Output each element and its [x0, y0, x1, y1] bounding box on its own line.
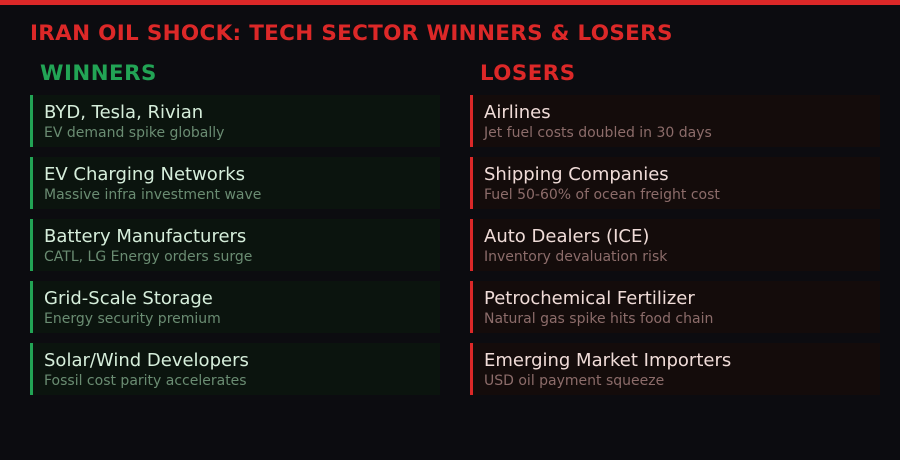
card: petrochemical: Petrochemical Fertilizer [484, 288, 695, 309]
card: grid storage: Grid-Scale Storage [44, 288, 213, 309]
card: airlines [470, 95, 880, 147]
card: petrochemical: Natural gas spike hits food chain [484, 311, 713, 327]
card: BYD: EV demand spike globally [44, 125, 224, 141]
card: EV charging: EV Charging Networks [44, 164, 245, 185]
card: auto dealers: Inventory devaluation risk [484, 249, 667, 265]
card: auto dealers: Auto Dealers (ICE) [484, 226, 649, 247]
card: solar/wind [30, 343, 440, 395]
panel: winners [30, 61, 261, 395]
card: airlines: Jet fuel costs doubled in 30 days [484, 125, 712, 141]
heading: winners: WINNERS [40, 61, 157, 86]
card: grid storage [30, 281, 440, 333]
card: auto dealers [470, 219, 880, 271]
card: emerging markets [470, 343, 880, 395]
card: battery [30, 219, 440, 271]
card: BYD [30, 95, 440, 147]
card: solar/wind: Solar/Wind Developers [44, 350, 249, 371]
card: petrochemical [470, 281, 880, 333]
card: EV charging: Massive infra investment wave [44, 187, 261, 203]
card: solar/wind: Fossil cost parity accelerates [44, 373, 247, 389]
card: EV charging [30, 157, 440, 209]
card: emerging markets: USD oil payment squeeze [484, 373, 664, 389]
card: shipping: Fuel 50-60% of ocean freight cost [484, 187, 720, 203]
card: airlines: Airlines [484, 102, 551, 123]
card: shipping: Shipping Companies [484, 164, 669, 185]
panel: losers [470, 61, 731, 395]
card: shipping [470, 157, 880, 209]
card: grid storage: Energy security premium [44, 311, 221, 327]
card: emerging markets: Emerging Market Importers [484, 350, 731, 371]
title: IRAN OIL SHOCK: TECH SECTOR WINNERS & LOSERS [30, 21, 673, 46]
card: BYD: BYD, Tesla, Rivian [44, 102, 203, 123]
heading: losers: LOSERS [480, 61, 576, 86]
card: battery: Battery Manufacturers [44, 226, 246, 247]
card: battery: CATL, LG Energy orders surge [44, 249, 252, 265]
